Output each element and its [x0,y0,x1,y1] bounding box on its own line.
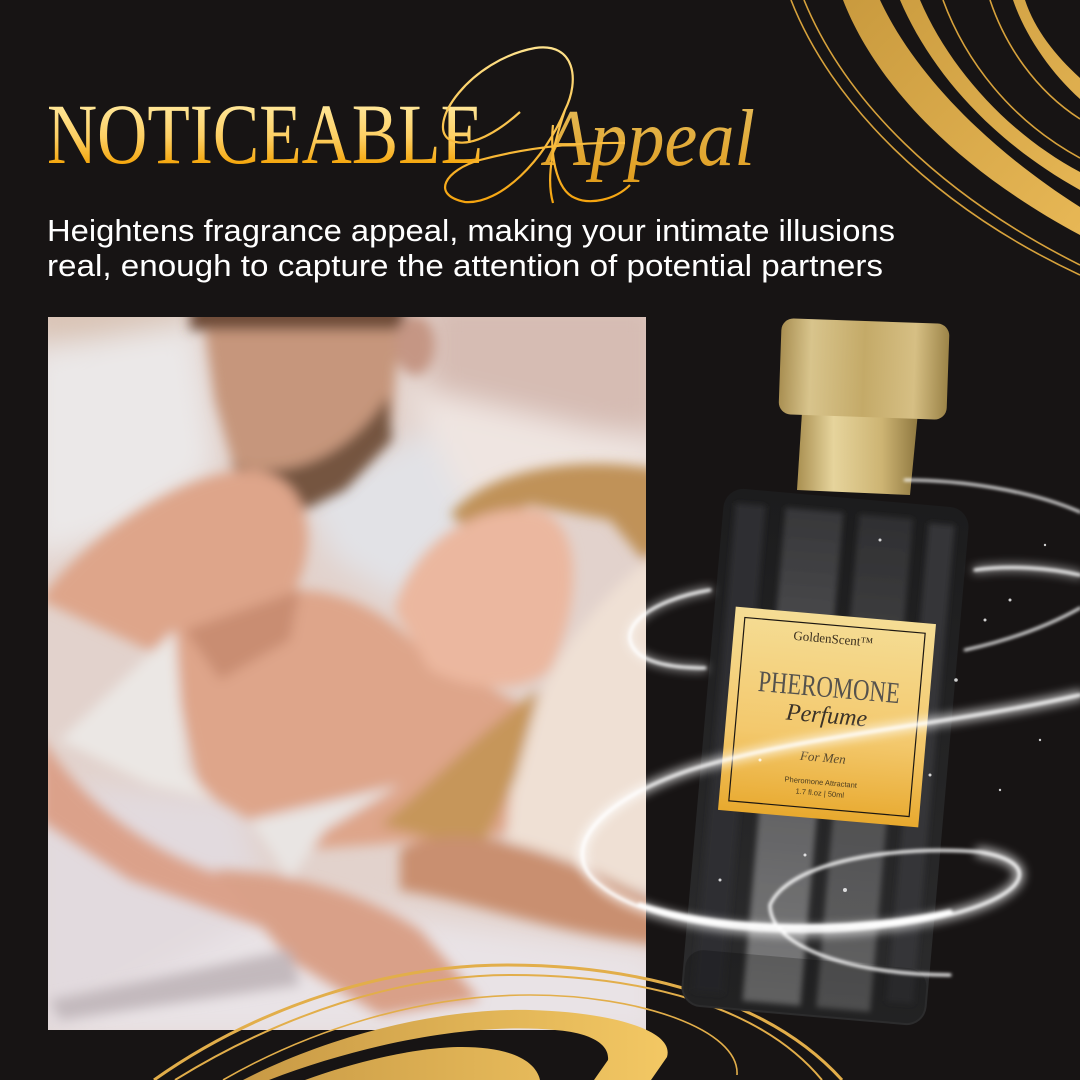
title: script word [443,47,755,203]
subtitle text [47,213,895,283]
sparkles [718,538,1046,892]
subtitle text: Heightens fragrance appeal, making your intimate illusions [47,213,895,248]
decorative gold arcs: bottom [154,965,842,1080]
bottle neck [797,412,918,495]
title: script word: Appeal [540,95,755,183]
title: serif word: NOTICEABLE [47,86,483,182]
script product line: Perfume [784,699,869,733]
audience line: For Men [798,748,846,767]
white light swirls [582,480,1080,975]
attractant line: Pheromone Attractant [784,775,858,790]
perfume bottle [680,318,970,1027]
subtitle text: real, enough to capture the attention of potential partners [47,248,883,283]
product label [718,607,936,827]
title [47,47,755,203]
bottle cap [778,318,950,420]
bottle body [680,487,970,1027]
product name: PHEROMONE [757,665,901,710]
size line: 1.7 fl.oz | 50ml [795,787,845,800]
brand name: GoldenScent™ [793,628,874,650]
decorative gold arcs: top right [791,0,1080,275]
photo panel: couple resting on a bed [30,300,660,1040]
